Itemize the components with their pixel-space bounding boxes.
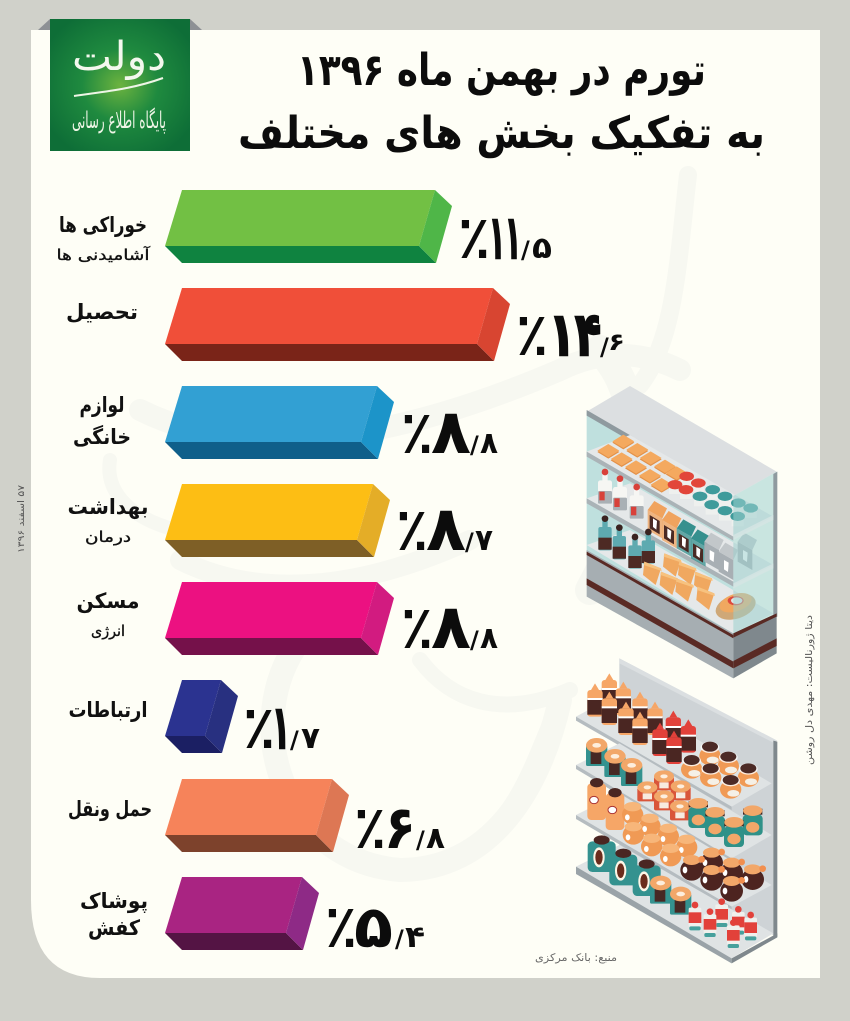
- label: clothing: کفش: [88, 916, 141, 940]
- value: transport: ٪: [354, 793, 386, 863]
- title: به تفکیک بخش های مختلف: [238, 108, 765, 159]
- illustration: refrigerated display case: [587, 386, 777, 678]
- label: transport: حمل ونقل: [68, 797, 152, 821]
- value: housing: [401, 590, 498, 663]
- value: housing: ۸: [480, 621, 498, 656]
- value: transport: [354, 793, 445, 863]
- label: household goods: [73, 393, 131, 449]
- title: تورم در بهمن ماه ۱۳۹۶: [297, 45, 706, 96]
- logo: [50, 19, 190, 151]
- bar: housing: [165, 582, 394, 655]
- value: household goods: ۸: [480, 426, 498, 461]
- bar: clothing: [165, 877, 319, 950]
- label: clothing: [80, 889, 148, 940]
- value: communications: ٪: [243, 693, 275, 763]
- bar: household goods: [165, 386, 394, 459]
- label: housing: مسکن: [76, 589, 140, 613]
- watermark calligraphy: [109, 175, 688, 870]
- bar: communications: [165, 680, 238, 753]
- value: food: ٪: [458, 203, 490, 273]
- value: clothing: ۵: [354, 893, 393, 961]
- value: health: [396, 492, 493, 565]
- bar: education: [165, 288, 510, 361]
- value: clothing: ٪: [325, 892, 357, 962]
- value: health: ۸: [426, 492, 466, 565]
- logo: پایگاه اطلاع رسانی: [72, 107, 166, 134]
- label: food: [56, 213, 151, 264]
- value: communications: ۷: [301, 721, 320, 756]
- value: transport: ۸: [426, 821, 445, 856]
- value: household goods: ۸: [431, 395, 471, 468]
- date note: ۵۷ اسفند ۱۳۹۶: [17, 485, 27, 553]
- value: household goods: /: [470, 431, 479, 459]
- value: housing: ٪: [401, 593, 433, 663]
- value: health: ۷: [475, 523, 493, 558]
- label: housing: انرژی: [91, 622, 125, 640]
- label: household goods: خانگی: [73, 424, 131, 449]
- value: clothing: ۴: [405, 920, 425, 955]
- value: clothing: /: [395, 925, 404, 953]
- label: health: بهداشت: [68, 495, 148, 519]
- illustration: grocery shelf: [576, 658, 777, 963]
- value: education: /: [600, 333, 609, 361]
- logo: دولت: [72, 34, 166, 80]
- value: transport: ۶: [384, 793, 416, 863]
- value: health: ٪: [396, 495, 428, 565]
- value: household goods: [401, 395, 498, 468]
- label: household goods: لوازم: [80, 393, 124, 417]
- value: health: /: [465, 528, 474, 556]
- label: communications: ارتباطات: [68, 698, 148, 722]
- value: food: ۱۱: [489, 203, 521, 273]
- bar: transport: [165, 779, 349, 852]
- value: food: /: [521, 236, 530, 264]
- value: clothing: [325, 892, 425, 962]
- label: health: [68, 495, 148, 546]
- value: communications: /: [290, 726, 299, 754]
- source note: منبع: بانک مرکزی: [535, 952, 617, 964]
- label: education: تحصیل: [66, 300, 138, 324]
- value: household goods: ٪: [401, 398, 433, 468]
- bar: health: [165, 484, 390, 557]
- value: food: ۵: [532, 231, 552, 266]
- credit note: دیتا ژورنالیست: مهدی دل روشن: [804, 615, 815, 765]
- value: food: [458, 203, 552, 273]
- label: health: درمان: [85, 528, 131, 546]
- label: food: آشامیدنی ها: [56, 246, 151, 264]
- value: transport: /: [416, 826, 425, 854]
- value: housing: /: [470, 626, 479, 654]
- value: communications: [243, 693, 320, 763]
- label: housing: [76, 589, 140, 640]
- value: education: ۱۴: [549, 300, 601, 370]
- value: education: ۶: [608, 328, 625, 356]
- value: education: ٪: [516, 300, 548, 370]
- bar: food: [165, 190, 452, 263]
- value: housing: ۸: [431, 590, 471, 663]
- label: food: خوراکی ها: [59, 213, 147, 237]
- title: [238, 45, 765, 159]
- logo ribbon folds: [38, 19, 202, 30]
- value: communications: ۱: [272, 693, 290, 763]
- value: education: [516, 300, 625, 370]
- label: clothing: پوشاک: [80, 889, 148, 913]
